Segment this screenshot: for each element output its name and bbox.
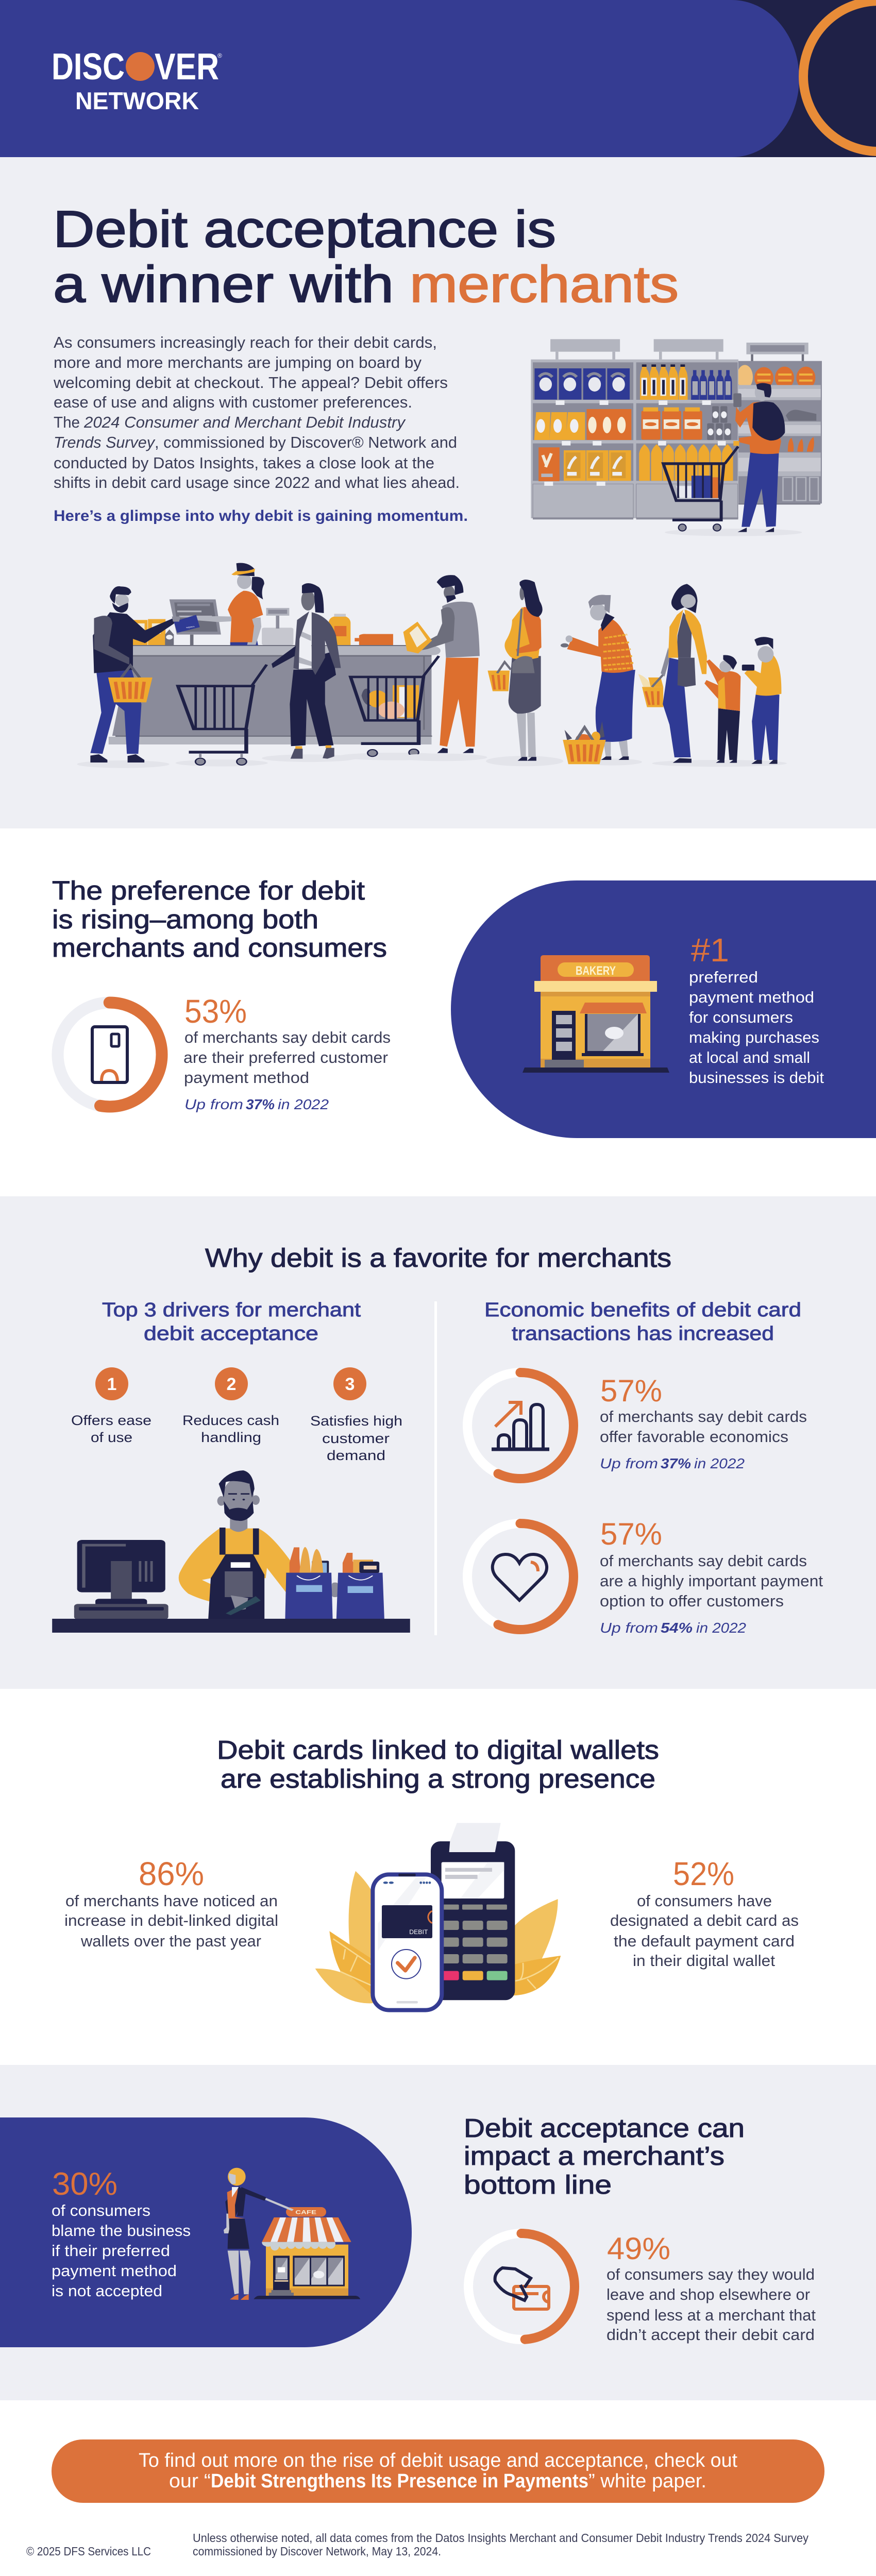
copyright: © 2025 DFS Services LLC (26, 2545, 151, 2558)
stat: 86% (64, 1855, 278, 1950)
stat: 52%: the default payment card (614, 1932, 795, 1950)
title: a winner with (53, 256, 394, 313)
panel: digital wallets (64, 1735, 799, 2010)
stat: 52%: 52% (673, 1855, 734, 1892)
stat: 30%: blame the business (52, 2222, 191, 2240)
heading: Debit cards linked to digital wallets (217, 1735, 659, 1765)
heading (52, 876, 387, 962)
woman with purse (487, 580, 543, 761)
stat: 57% favorable economics (600, 1374, 807, 1471)
stat: 57% important payment option: 54% (661, 1620, 693, 1636)
call to action banner (52, 2439, 824, 2503)
stat: 53%: 53% (184, 993, 247, 1030)
callout: glimpse line: Here’s a glimpse into why debit is gaining momentum. (54, 507, 468, 524)
intro paragraph: shifts in debit card usage since 2022 and what lies ahead. (54, 473, 460, 492)
illustration: shopper at store shelves (531, 339, 822, 536)
intro paragraph (53, 333, 460, 492)
source footnote: commissioned by Discover Network, May 13, 2024. (193, 2545, 441, 2558)
illustration: queue of shoppers (397, 575, 787, 767)
woman with cart (272, 583, 341, 759)
heading (464, 2113, 745, 2199)
panel: bottom line (0, 2113, 816, 2347)
stat: 49%: 49% (607, 2231, 670, 2266)
intro paragraph: As consumers increasingly reach for their debit cards, (54, 333, 437, 351)
subheading: economic benefits: transactions has increased (512, 1323, 774, 1345)
heading: impact a merchant’s (464, 2141, 725, 2171)
stat: #1: preferred (689, 968, 758, 986)
call to action banner: our “ (169, 2470, 211, 2492)
intro paragraph: welcoming debit at checkout. The appeal? Debit offers (53, 374, 448, 392)
stat: 86%: of merchants have noticed an (65, 1892, 278, 1910)
stat: 49%: leave and shop elsewhere or (607, 2285, 810, 2303)
stat: 57% important payment option: Up from (600, 1620, 658, 1636)
callout panel: 30% (0, 2117, 412, 2347)
stat: 57% favorable economics: Up from (600, 1455, 658, 1471)
stat: 86%: 86% (139, 1855, 204, 1892)
stat: 52%: designated a debit card as (610, 1911, 799, 1929)
stat: 53%: 37% (246, 1096, 275, 1112)
illustration: phone and payment terminal (315, 1823, 561, 2010)
icon: heart (493, 1554, 547, 1600)
cart one (178, 665, 267, 765)
intro paragraph: more and more merchants are jumping on board by (54, 353, 422, 371)
stat: #1: businesses is debit (689, 1069, 824, 1087)
panel: #1 preferred payment (451, 880, 876, 1138)
donut chart: 49% (468, 2233, 575, 2340)
products: blue bags (534, 368, 630, 400)
debit card (174, 615, 200, 633)
subheading: top 3 drivers (102, 1299, 361, 1345)
heading (217, 1735, 659, 1793)
title: merchants (410, 256, 679, 313)
cart two (350, 656, 439, 756)
product box held (403, 622, 432, 653)
child two (742, 637, 781, 764)
title: Debit acceptance is (53, 200, 556, 258)
stat: #1 (689, 931, 824, 1087)
logo: Discover Network: ® (217, 52, 222, 59)
stat: 53%: payment method (184, 1069, 309, 1087)
shopper (733, 383, 785, 532)
driver 1: of use (91, 1430, 132, 1445)
stat: 57% important payment option: of merchants say debit cards (600, 1552, 807, 1570)
title (53, 200, 679, 313)
stat: 57% favorable economics: 37% (661, 1455, 691, 1471)
counter (109, 645, 441, 744)
logo: Discover Network (52, 46, 222, 114)
stat: 57% important payment option (600, 1517, 823, 1636)
customer paying with basket (90, 586, 180, 762)
monitor and register (170, 599, 293, 645)
stat: 57% favorable economics: of merchants say debit cards (600, 1408, 807, 1426)
source footnote: Unless otherwise noted, all data comes from the Datos Insights Merchant and Consumer Debit Industry Trends 2024 Survey (193, 2531, 808, 2545)
stat: 53%: are their preferred customer (183, 1048, 388, 1066)
heading: The preference for debit (52, 876, 365, 905)
intro paragraph: conducted by Datos Insights, takes a close look at the (54, 454, 434, 472)
driver 1: 1 (107, 1375, 116, 1394)
donut chart: 57% important option (467, 1523, 574, 1630)
illustration: checkout counter with customers (77, 563, 454, 768)
counter items (132, 614, 393, 647)
stat: 49% (607, 2231, 816, 2344)
driver 2: 2 (227, 1375, 236, 1394)
stat: #1: at local and small (689, 1048, 810, 1066)
source footnote (193, 2531, 808, 2558)
stat: 57% important payment option: option to offer customers (600, 1592, 784, 1610)
heading: are establishing a strong presence (221, 1764, 655, 1793)
call to action banner: To find out more on the rise of debit usage and acceptance, check out (139, 2450, 737, 2471)
stat: 49%: of consumers say they would (607, 2265, 815, 2283)
subheading: economic benefits: Economic benefits of debit card (484, 1299, 801, 1321)
mother (638, 584, 707, 763)
intro paragraph: The (54, 413, 80, 431)
stat: 53%: of merchants say debit cards (184, 1028, 391, 1046)
shopping cart (663, 447, 738, 531)
third shelf unit (737, 361, 822, 504)
driver 3: 3 (345, 1375, 355, 1394)
panel: why debit is a favorite (52, 1243, 823, 1636)
floor basket (563, 721, 606, 764)
stat: 86%: increase in debit-linked digital (64, 1911, 278, 1929)
stat: 57% favorable economics: 57% (600, 1374, 662, 1408)
stat: 30%: of consumers (52, 2201, 150, 2219)
main shelf units (531, 360, 738, 519)
illustration: woman and cafe (224, 2168, 360, 2300)
child one (704, 655, 740, 763)
stat: 57% favorable economics: in 2022 (694, 1455, 745, 1471)
driver 2: handling (201, 1430, 261, 1445)
heading: Why debit is a favorite for merchants (205, 1243, 671, 1273)
illustration: cashier at counter (52, 1470, 410, 1633)
logo: Discover Network: VER (155, 46, 219, 88)
stat: 30%: if their preferred (52, 2242, 170, 2260)
driver 3: Satisfies high (310, 1413, 402, 1429)
products: bottles (640, 364, 732, 400)
driver 1: Offers ease (71, 1413, 151, 1428)
intro paragraph: Trends Survey (54, 433, 156, 451)
driver 2: Reduces cash (182, 1413, 279, 1428)
icon: bakery storefront: BAKERY (576, 964, 616, 978)
stat: #1: #1 (691, 931, 729, 969)
icon: growth chart (492, 1402, 549, 1449)
panel: preference for debit (52, 876, 391, 1112)
stat: 52% (610, 1855, 799, 1970)
stat: #1: making purchases (689, 1028, 819, 1046)
heading: bottom line (464, 2170, 612, 2199)
heading: merchants and consumers (52, 933, 387, 962)
stat: 57% important payment option: are a highly important payment (600, 1572, 823, 1590)
heading: Debit acceptance can (464, 2113, 745, 2143)
icon: hand with wallet (495, 2268, 549, 2309)
heading: is rising–among both (52, 905, 318, 934)
stat: 49%: didn’t accept their debit card (607, 2326, 815, 2344)
debit card: open (186, 626, 195, 629)
subheading: economic benefits (484, 1299, 801, 1345)
icon: orange ring (803, 1, 876, 151)
stat: #1: for consumers (689, 1008, 793, 1026)
stat: 30%: is not accepted (52, 2282, 162, 2300)
stat: 86%: wallets over the past year (80, 1932, 261, 1950)
stat: 57% favorable economics: offer favorable economics (600, 1428, 788, 1446)
logo: Discover Network: DISC (52, 46, 125, 88)
call to action banner: Debit Strengthens Its Presence in Payments (211, 2470, 588, 2492)
donut chart: 57% economics (467, 1372, 574, 1479)
stat: 52%: of consumers have (637, 1892, 772, 1910)
stat: 30%: payment method (52, 2262, 177, 2280)
stat: 30%: 30% (52, 2166, 117, 2202)
call to action banner: ” white paper. (588, 2470, 706, 2492)
stat: 30% (52, 2166, 191, 2300)
stat: 52%: in their digital wallet (633, 1952, 775, 1970)
donut chart: 53% (58, 1003, 162, 1107)
intro paragraph: , commissioned by Discover® Network and (155, 433, 457, 451)
stat: 53% (183, 993, 391, 1112)
older woman (561, 595, 635, 760)
stat: 57% important payment option: 57% (600, 1517, 662, 1551)
icon: bakery storefront (523, 955, 669, 1073)
stat: #1: payment method (689, 988, 814, 1006)
illustration: woman and cafe: CAFE (295, 2210, 317, 2216)
intro paragraph: ease of use and aligns with customer preferences. (54, 393, 412, 411)
driver 3: demand (327, 1448, 385, 1463)
intro paragraph: 2024 Consumer and Merchant Debit Industry (83, 413, 407, 431)
stat: 49%: spend less at a merchant that (607, 2306, 816, 2324)
driver 1 (71, 1367, 151, 1445)
driver 3: customer (322, 1431, 390, 1446)
products: packs and jars (534, 406, 733, 481)
stat: 53%: in 2022 (278, 1096, 329, 1112)
subheading: top 3 drivers: debit acceptance (144, 1323, 318, 1345)
stat: 57% important payment option: in 2022 (696, 1620, 746, 1636)
man with orange pants (415, 575, 480, 753)
header banner (0, 0, 876, 157)
cashier (195, 563, 264, 646)
driver 2 (182, 1367, 279, 1445)
illustration: phone and payment terminal: DEBIT (409, 1928, 428, 1936)
subheading: top 3 drivers: Top 3 drivers for merchant (102, 1299, 361, 1321)
logo: Discover Network: NETWORK (75, 87, 199, 114)
driver 3 (310, 1367, 402, 1463)
stat: 53%: Up from (184, 1096, 243, 1112)
icon: card (92, 1027, 127, 1082)
